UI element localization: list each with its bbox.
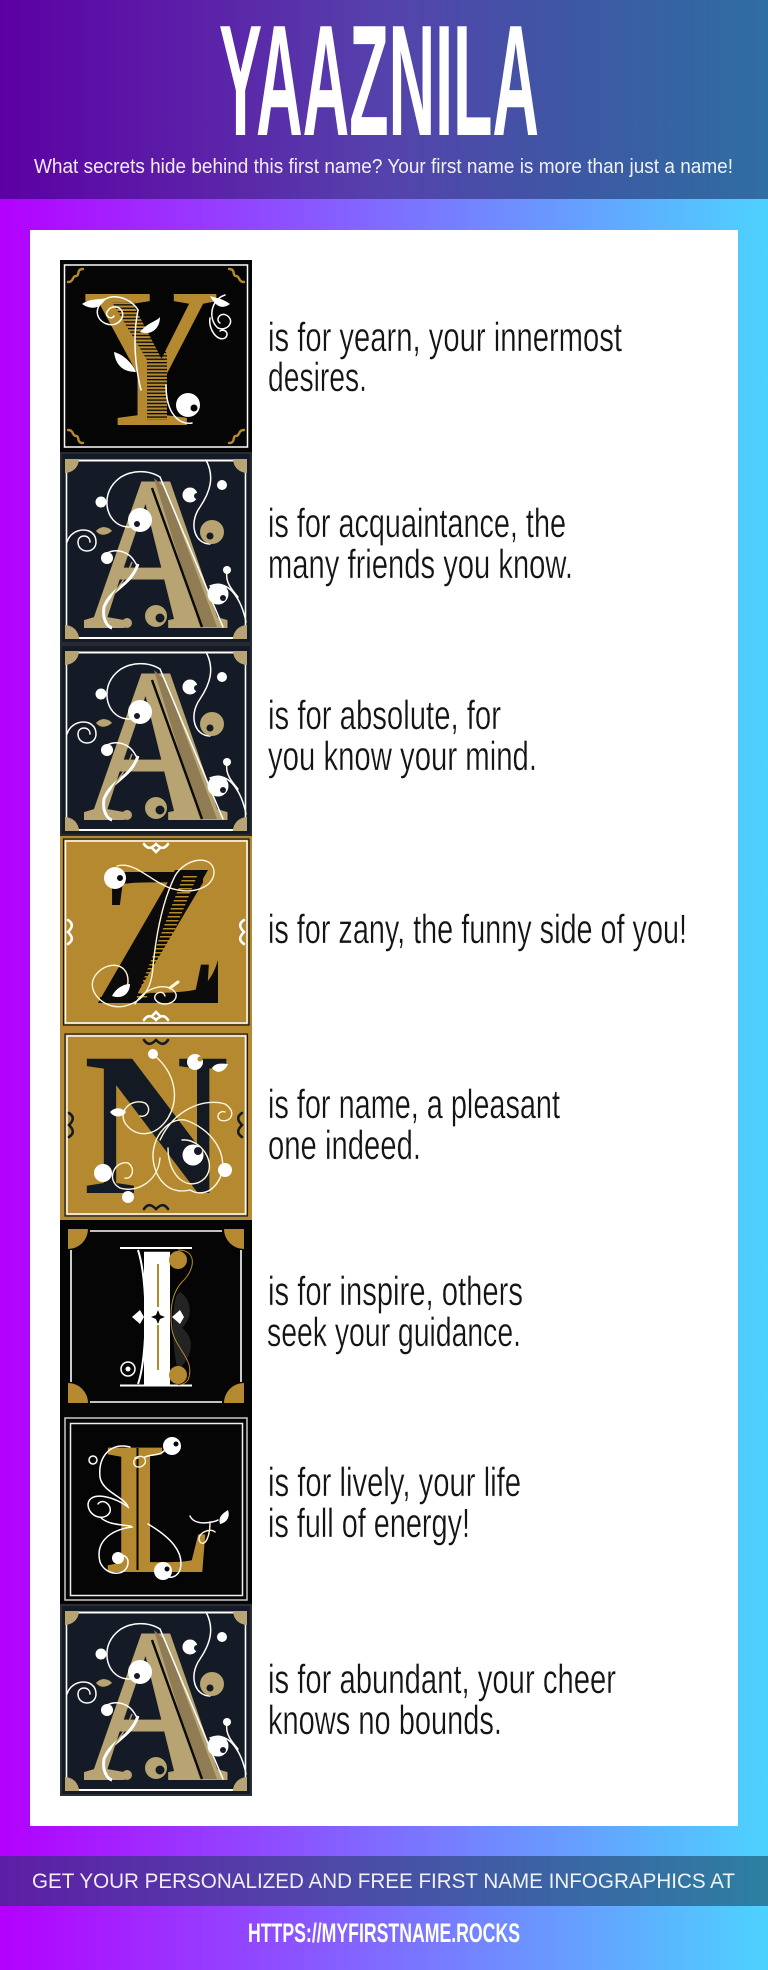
text: N line: is for name, a pleasant [268, 1081, 560, 1127]
tile: letter N: N [83, 1011, 229, 1238]
subtitle: What secrets hide behind this first name? Your first name is more than just a name! [34, 155, 733, 178]
tile: letter I: I [121, 1204, 195, 1431]
header band [0, 0, 768, 199]
tile: letter A (acquaintance): A [82, 431, 229, 677]
text: Y line: desires. [268, 354, 367, 400]
text: Y line [268, 314, 622, 400]
tile: letter I [60, 1204, 252, 1431]
tile: letter A (absolute): A [82, 623, 229, 869]
text: I line [267, 1268, 523, 1355]
tile: letter A (abundant): A [82, 1583, 229, 1829]
text: A line [268, 500, 573, 587]
tile: letter Y: Y [82, 248, 220, 469]
text: L line: is full of energy! [268, 1500, 470, 1546]
text: L line: is for lively, your life [268, 1459, 521, 1505]
text: N line [268, 1081, 560, 1168]
footer url: HTTPS://MYFIRSTNAME.ROCKS [248, 1918, 520, 1948]
text: A line 3: knows no bounds. [268, 1697, 502, 1743]
text: A line: many friends you know. [268, 541, 573, 587]
text: I line: seek your guidance. [267, 1309, 521, 1355]
text: Y line: is for yearn, your innermost [268, 314, 622, 360]
text: A line 3: is for abundant, your cheer [268, 1656, 616, 1702]
text: A line 2: you know your mind. [268, 733, 537, 779]
text: A line 2 [268, 692, 537, 779]
text: A line 2: is for absolute, for [268, 692, 501, 738]
tile: letter Z [60, 826, 252, 1047]
footer call to action: GET YOUR PERSONALIZED AND FREE FIRST NAME INFOGRAPHICS AT [32, 1870, 735, 1893]
tile: letter Z: Z [98, 826, 218, 1047]
footer band [0, 1856, 768, 1906]
panel: white content card [30, 230, 738, 1826]
text: I line: is for inspire, others [268, 1268, 523, 1314]
text: A line 3 [268, 1656, 616, 1743]
tile: letter L [60, 1404, 252, 1614]
text: N line: one indeed. [268, 1122, 421, 1168]
text: L line [268, 1459, 521, 1546]
tile: letter L: L [105, 1404, 212, 1614]
text: A line: is for acquaintance, the [268, 500, 566, 546]
